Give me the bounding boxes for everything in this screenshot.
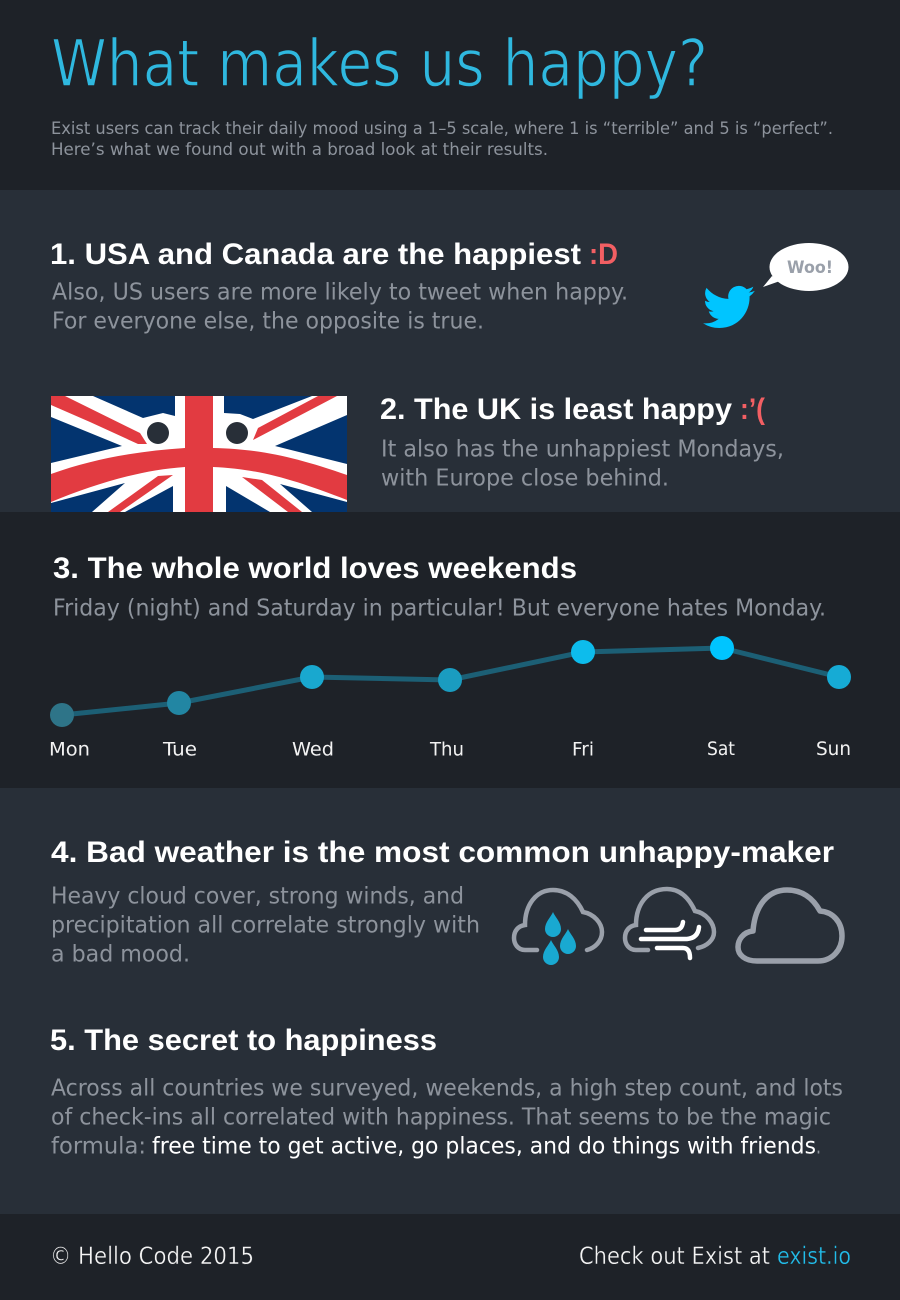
line chart: mood by weekday: Thu bbox=[429, 738, 464, 760]
icon: wind cloud bbox=[625, 889, 714, 958]
text: finding 5: of check-ins all correlated with happiness. That seems to be the magic bbox=[51, 1102, 831, 1130]
line chart: mood by weekday bbox=[49, 636, 851, 760]
text: finding 5: formula: bbox=[51, 1132, 146, 1160]
text: finding 5: Across all countries we surveyed, weekends, a high step count, and lots bbox=[51, 1074, 843, 1102]
heading: finding 1: :D bbox=[589, 238, 618, 271]
text: finding 1: For everyone else, the opposite is true. bbox=[52, 306, 484, 334]
text: finding 4: a bad mood. bbox=[51, 940, 190, 968]
title: What makes us happy? bbox=[51, 27, 708, 102]
line chart: mood by weekday: Wed bbox=[292, 738, 334, 760]
intro text bbox=[51, 119, 833, 159]
intro text: Here’s what we found out with a broad look at their results. bbox=[51, 140, 548, 159]
text: finding 3: Friday (night) and Saturday in particular! But everyone hates Monday. bbox=[53, 594, 826, 622]
heading: finding 2: 2. The UK is least happy bbox=[380, 393, 732, 426]
text: finding 2 bbox=[381, 434, 784, 492]
heading: finding 3: 3. The whole world loves weekends bbox=[53, 552, 577, 585]
heading: finding 1: 1. USA and Canada are the happiest bbox=[50, 238, 581, 271]
line chart: mood by weekday: Sun bbox=[816, 738, 851, 760]
intro text: Exist users can track their daily mood using a 1–5 scale, where 1 is “terrible” and 5 is “perfect”. bbox=[51, 119, 833, 138]
line chart: mood by weekday: Fri bbox=[572, 738, 594, 760]
text: finding 1 bbox=[52, 278, 628, 334]
text: finding 5: . bbox=[816, 1132, 821, 1160]
text: finding 4: precipitation all correlate strongly with bbox=[51, 910, 480, 938]
panel: footer bbox=[0, 1214, 900, 1300]
line chart: mood by weekday: Sat bbox=[707, 738, 735, 760]
text: finding 4: Heavy cloud cover, strong winds, and bbox=[51, 882, 464, 910]
speech bubble bbox=[763, 243, 848, 291]
text: finding 5 bbox=[51, 1074, 843, 1160]
text: finding 4 bbox=[51, 882, 480, 968]
text: finding 5: free time to get active, go places, and do things with friends bbox=[152, 1132, 816, 1160]
icon: heavy cloud bbox=[738, 890, 842, 961]
speech bubble: Woo! bbox=[787, 258, 833, 278]
illustration: union flag with eyes bbox=[51, 396, 347, 512]
text: finding 1: Also, US users are more likely to tweet when happy. bbox=[52, 278, 628, 306]
call to action link: exist.io bbox=[777, 1242, 851, 1270]
heading: finding 2: :’( bbox=[740, 393, 765, 426]
panel: finding 3 weekends bbox=[0, 512, 900, 788]
icon: rain cloud bbox=[514, 890, 602, 965]
heading: finding 4: 4. Bad weather is the most common unhappy-maker bbox=[51, 836, 834, 869]
call to action link: Check out Exist at bbox=[579, 1242, 770, 1270]
text: finding 2: with Europe close behind. bbox=[381, 464, 669, 492]
text: finding 2: It also has the unhappiest Mondays, bbox=[381, 434, 784, 462]
panel: header bbox=[0, 0, 900, 190]
line chart: mood by weekday: Tue bbox=[162, 738, 197, 760]
panel: findings 4 and 5 bbox=[0, 788, 900, 1214]
icon: twitter bird bbox=[703, 286, 755, 328]
copyright: © Hello Code 2015 bbox=[50, 1242, 254, 1270]
panel: findings 1 and 2 bbox=[0, 190, 900, 512]
line chart: mood by weekday: Mon bbox=[49, 738, 90, 760]
heading: finding 5: 5. The secret to happiness bbox=[50, 1024, 437, 1057]
